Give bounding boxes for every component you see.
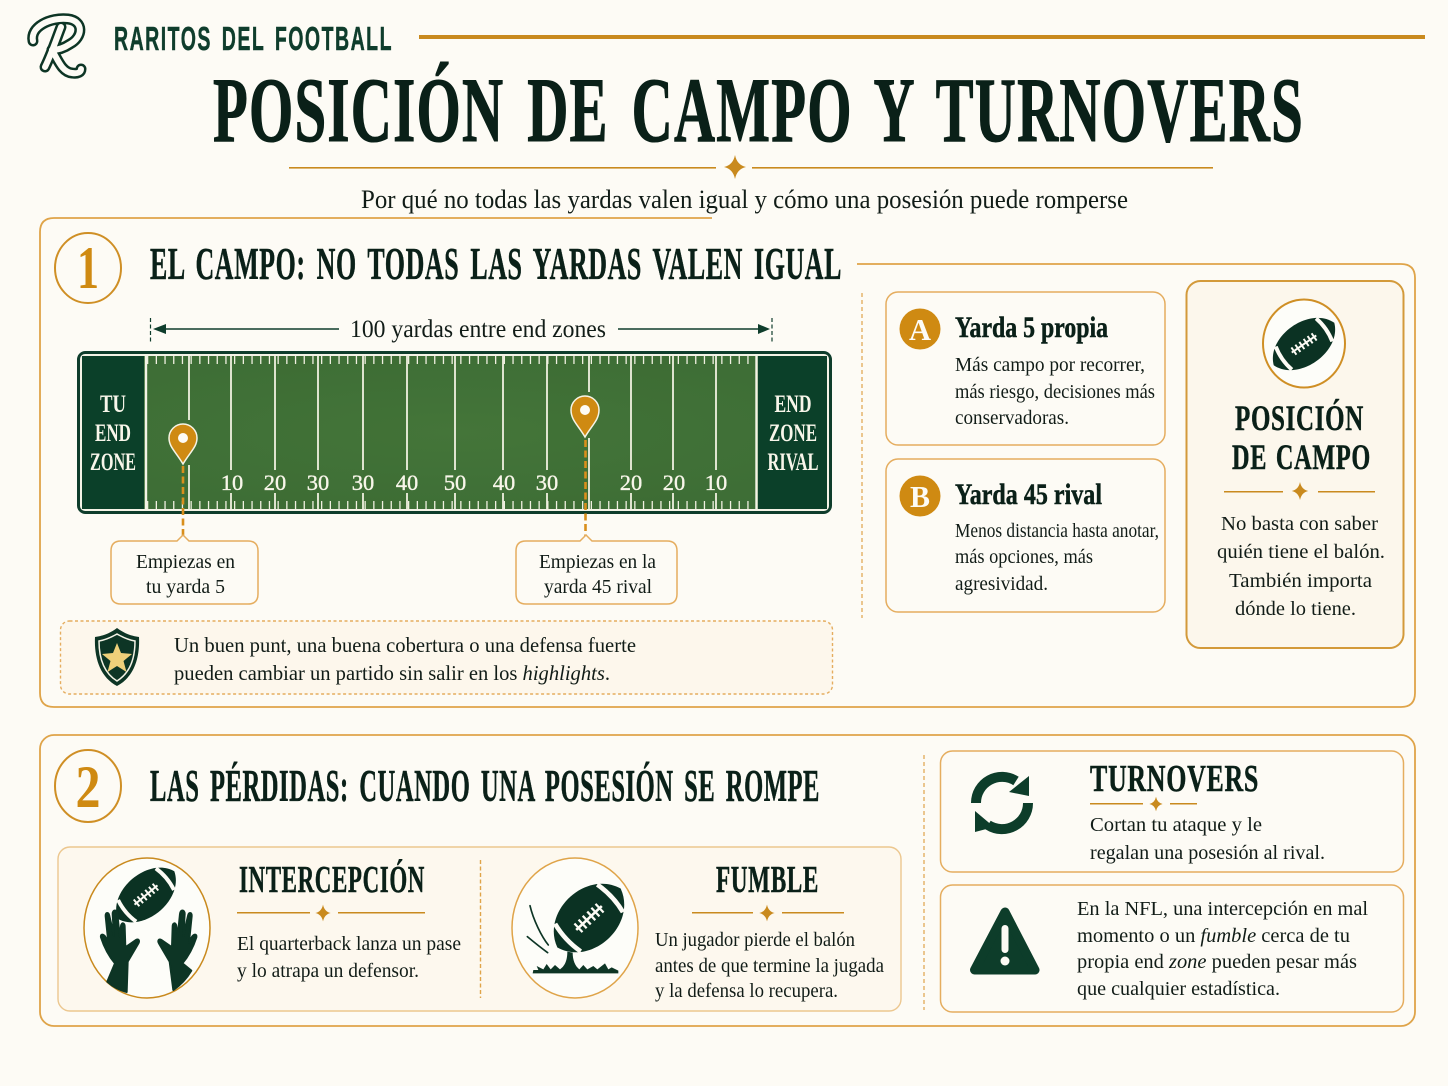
card: turnovers (940, 751, 1404, 872)
icon: rotating arrows (975, 776, 1029, 832)
header rule (419, 35, 1425, 39)
card: warning: que cualquier estadística. (1077, 978, 1280, 1000)
card B: yarda 45 rival: agresividad. (955, 573, 1048, 595)
card B: yarda 45 rival: Yarda 45 rival (955, 478, 1102, 511)
fumble text: y la defensa lo recupera. (655, 980, 838, 1002)
icon: football (1262, 300, 1346, 388)
interception text: y lo atrapa un defensor. (237, 960, 419, 982)
end zone left label (90, 391, 136, 476)
distance arrow: 100 yardas: 100 yardas entre end zones (350, 316, 606, 343)
divider (1090, 797, 1197, 811)
card: turnovers: regalan una posesión al rival. (1090, 842, 1325, 864)
card: posición de campo: POSICIÓN (1235, 398, 1364, 438)
card: turnovers: Cortan tu ataque y le (1090, 814, 1262, 836)
card: warning (940, 885, 1404, 1012)
section number 2: 2 (76, 754, 100, 820)
callout: yarda 45 rival: Empiezas en la (539, 551, 656, 573)
interception text (237, 859, 461, 982)
end zone right label (768, 391, 818, 476)
card: turnovers: TURNOVERS (1090, 758, 1259, 800)
card: warning: En la NFL, una intercepción en mal (1077, 898, 1368, 920)
card B: yarda 45 rival: más opciones, más (955, 546, 1093, 568)
panel divider (923, 755, 925, 1010)
note box: defensa: pueden cambiar un partido sin salir en los highlights. (174, 661, 610, 685)
yard numbers: 30 (352, 470, 374, 495)
panel divider (861, 293, 863, 618)
yard numbers: 40 (396, 470, 418, 495)
end zone left label: TU (100, 391, 126, 418)
section number 1: 1 (77, 235, 99, 301)
panel: las pérdidas (40, 735, 1415, 1026)
note box: defensa (60, 621, 832, 694)
yard numbers: 20 (264, 470, 286, 495)
yard numbers: 30 (307, 470, 329, 495)
yard numbers: 30 (536, 470, 558, 495)
card A: yarda 5 propia: conservadoras. (955, 407, 1069, 429)
card A: yarda 5 propia: Más campo por recorrer, (955, 354, 1145, 376)
heading: el campo: EL CAMPO: NO TODAS LAS YARDAS VALEN IGUAL (150, 239, 842, 289)
icon: fumble (512, 858, 640, 998)
heading: las pérdidas: LAS PÉRDIDAS: CUANDO UNA POSESIÓN SE ROMPE (150, 761, 820, 811)
yard numbers: 20 (620, 470, 642, 495)
yard numbers: 10 (221, 470, 243, 495)
yard numbers (221, 470, 727, 495)
end zone right label: RIVAL (768, 449, 818, 476)
icon: shield with star (95, 628, 139, 686)
football field (78, 352, 830, 512)
yard numbers: 50 (444, 470, 466, 495)
card A: yarda 5 propia (886, 292, 1165, 445)
icon: warning triangle (974, 912, 1035, 970)
fumble text: FUMBLE (716, 859, 819, 901)
interception text: El quarterback lanza un pase (237, 933, 461, 955)
interception text: INTERCEPCIÓN (239, 859, 425, 901)
card: posición de campo: dónde lo tiene. (1235, 598, 1356, 620)
card A: yarda 5 propia: Yarda 5 propia (955, 311, 1108, 344)
yard numbers: 20 (663, 470, 685, 495)
callout: yarda 5 (111, 535, 258, 604)
card: posición de campo: DE CAMPO (1232, 437, 1371, 477)
end zone right label: ZONE (769, 420, 817, 447)
card: warning: propia end zone pueden pesar más (1077, 951, 1357, 973)
brand name: RARITOS DEL FOOTBALL (114, 20, 393, 57)
card A: yarda 5 propia: A (909, 312, 932, 347)
section number 1 (55, 233, 121, 303)
end zone left label: END (95, 420, 131, 447)
divider (1224, 482, 1375, 500)
icon: interception (84, 855, 210, 998)
fumble text: Un jugador pierde el balón (655, 929, 855, 951)
yard numbers: 10 (705, 470, 727, 495)
end zone right label: END (774, 391, 812, 418)
panel: interception and fumble (58, 847, 901, 1011)
card: posición de campo (1186, 281, 1404, 648)
title divider (289, 155, 1213, 179)
card: warning: momento o un fumble cerca de tu (1077, 925, 1350, 947)
callout: yarda 45 rival: yarda 45 rival (544, 576, 652, 598)
marker: yarda 5 (169, 424, 197, 537)
yard numbers: 40 (493, 470, 515, 495)
callout: yarda 5: Empiezas en (136, 551, 235, 573)
card: posición de campo: quién tiene el balón. (1217, 541, 1385, 563)
subtitle: Por qué no todas las yardas valen igual y cómo una posesión puede romperse (361, 185, 1128, 214)
card: posición de campo: También importa (1229, 570, 1372, 592)
card A: yarda 5 propia: más riesgo, decisiones más (955, 381, 1155, 403)
card: posición de campo: No basta con saber (1221, 513, 1378, 535)
card B: yarda 45 rival: B (910, 479, 930, 514)
end zone left label: ZONE (90, 449, 136, 476)
fumble text: antes de que termine la jugada (655, 955, 884, 977)
card B: yarda 45 rival: Menos distancia hasta anotar, (955, 520, 1159, 542)
callout: yarda 45 rival (516, 535, 677, 604)
marker: yarda 45 rival (571, 396, 599, 537)
distance arrow: 100 yardas (150, 316, 772, 343)
icon: script R logo (33, 19, 81, 73)
card B: yarda 45 rival (886, 459, 1165, 612)
section number 2 (55, 750, 121, 822)
callout: yarda 5: tu yarda 5 (146, 576, 225, 598)
panel: el campo (40, 218, 1415, 707)
note text: Un buen punt, una buena cobertura o una defensa fuerte (174, 633, 636, 657)
fumble text (655, 859, 884, 1002)
